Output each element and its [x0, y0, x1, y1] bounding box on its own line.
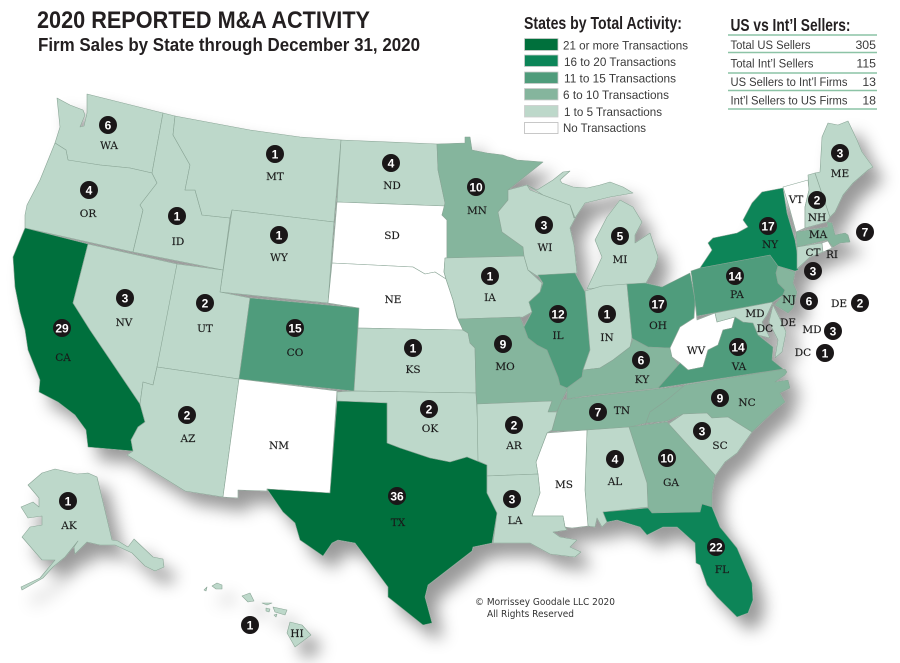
state: UT — [157, 264, 250, 379]
state name labels: IN — [600, 332, 614, 344]
row: total international sellers: 115 — [856, 56, 876, 70]
transaction count badges: 10 — [660, 451, 674, 465]
state name labels: KY — [635, 374, 650, 386]
state name labels: MI — [613, 254, 627, 266]
state name labels: ID — [172, 236, 184, 248]
row: US sellers to international firms: US Sellers to Int’l Firms — [730, 75, 848, 89]
transaction count badges: 7 — [595, 405, 602, 419]
row: total international sellers — [730, 56, 876, 70]
transaction count badges: 5 — [617, 229, 624, 243]
state name labels: MS — [555, 479, 573, 491]
legend: 6 to 10: 6 to 10 Transactions — [563, 88, 669, 102]
state: TX — [267, 401, 497, 625]
state name labels: IL — [552, 330, 564, 342]
transaction count badges: 1 — [247, 618, 254, 632]
state name labels: DC — [795, 347, 811, 359]
state: KS — [354, 328, 476, 393]
legend: none — [524, 121, 646, 135]
title: 2020 REPORTED M&A ACTIVITY — [37, 7, 370, 34]
transaction count badges: 22 — [709, 540, 723, 554]
state: CA — [13, 228, 145, 451]
state: OH — [627, 273, 695, 348]
transaction count badges: 14 — [728, 269, 742, 283]
transaction count badges: 4 — [388, 156, 395, 170]
state: IN — [583, 284, 632, 370]
copyright note: All Rights Reserved — [487, 609, 574, 620]
copyright note: © Morrissey Goodale LLC 2020 — [475, 597, 615, 608]
transaction count badges: 9 — [717, 391, 724, 405]
state: OK — [337, 391, 479, 462]
state name labels: GA — [663, 477, 679, 489]
state name labels: MA — [809, 229, 828, 241]
state: ME — [815, 121, 873, 217]
state name labels: LA — [508, 515, 523, 527]
state: CT — [797, 243, 823, 269]
transaction count badges: 14 — [731, 340, 745, 354]
state name labels: MO — [495, 361, 515, 373]
state: SC — [667, 413, 752, 476]
transaction count badges: 2 — [426, 402, 433, 416]
row: total US sellers: Total US Sellers — [730, 38, 810, 52]
state: GA — [629, 422, 715, 513]
state name labels: NE — [385, 294, 401, 306]
state name labels: VA — [731, 361, 747, 373]
state name labels: AZ — [180, 433, 195, 445]
state: WA — [55, 94, 163, 173]
transaction count badges: 10 — [469, 180, 483, 194]
transaction count badges: 3 — [509, 492, 516, 506]
state name labels: WA — [100, 140, 118, 152]
subtitle: Firm Sales by State through December 31, 2020 — [38, 35, 420, 55]
state name labels: NY — [762, 239, 779, 251]
state: MI upper — [527, 171, 633, 218]
state name labels: MD — [745, 308, 765, 320]
state: AK — [21, 469, 164, 590]
state: PA — [691, 255, 785, 316]
row: total international sellers: Total Int’l Sellers — [730, 56, 814, 70]
transaction count badges: 3 — [830, 324, 837, 338]
transaction count badges: 15 — [288, 321, 302, 335]
transaction count badges: 4 — [86, 183, 93, 197]
transaction count badges: 1 — [410, 341, 417, 355]
state name labels: OK — [422, 423, 438, 435]
state name labels: CT — [805, 247, 821, 259]
transaction count badges: 9 — [500, 337, 507, 351]
transaction count badges: 2 — [511, 418, 518, 432]
transaction count badges: 1 — [822, 346, 829, 360]
transaction count badges: 2 — [814, 193, 821, 207]
transaction count badges: 3 — [541, 218, 548, 232]
map of US states — [13, 94, 873, 647]
state name labels: CA — [55, 352, 71, 364]
state name labels — [55, 140, 849, 640]
state name labels: PA — [730, 289, 744, 301]
state: NH — [805, 173, 830, 228]
state: OR — [25, 143, 157, 252]
state: CO — [239, 298, 359, 391]
transaction count badges: 2 — [202, 296, 209, 310]
table: US vs international sellers — [728, 15, 877, 109]
state: MN — [437, 137, 543, 258]
state name labels: SD — [384, 230, 400, 242]
transaction count badges: 3 — [699, 424, 706, 438]
state name labels: WV — [687, 345, 706, 357]
legend: none: No Transactions — [563, 121, 646, 135]
state: NV — [73, 244, 177, 404]
state: MD — [715, 302, 773, 338]
state name labels: CO — [287, 347, 304, 359]
state: SD — [332, 202, 447, 279]
row: total US sellers — [730, 38, 876, 52]
state: HI — [204, 583, 311, 647]
state: KY — [567, 339, 680, 399]
transaction count badges: 6 — [638, 353, 645, 367]
legend: 11 to 15: 11 to 15 Transactions — [564, 72, 676, 86]
state name labels: DE — [831, 298, 847, 310]
state name labels: WI — [538, 242, 552, 254]
state name labels: NM — [269, 440, 289, 452]
state name labels: NC — [738, 397, 756, 409]
state name labels: DE — [780, 317, 796, 329]
transaction count badges: 2 — [184, 408, 191, 422]
state name labels: HI — [290, 628, 304, 640]
copyright note — [475, 597, 615, 620]
state: DE — [769, 305, 786, 358]
state: LA — [487, 474, 581, 557]
state name labels: MN — [467, 205, 487, 217]
state name labels: RI — [826, 249, 838, 261]
state: NM — [223, 379, 337, 498]
transaction count badges: 17 — [761, 219, 775, 233]
state: MA — [796, 222, 850, 247]
state: VT — [783, 180, 809, 232]
state name labels: NJ — [782, 294, 796, 306]
state: AR — [477, 401, 557, 476]
state: IL — [524, 273, 590, 388]
transaction count badges: 3 — [122, 291, 129, 305]
state name labels: TX — [391, 517, 406, 529]
legend: 16 to 20: 16 to 20 Transactions — [564, 55, 676, 69]
state name labels: AR — [505, 440, 523, 452]
state name labels: DC — [757, 323, 773, 335]
transaction count badges: 4 — [612, 452, 619, 466]
transaction count badges: 2 — [857, 296, 864, 310]
state: ND — [337, 140, 445, 206]
transaction count badges: 1 — [487, 269, 494, 283]
state: NE — [328, 263, 463, 330]
row: international sellers to US firms: Int’l Sellers to US Firms — [730, 94, 848, 108]
transaction count badges: 1 — [272, 147, 279, 161]
transaction count badges: 6 — [105, 118, 112, 132]
state name labels: IA — [484, 292, 496, 304]
transaction count badges — [53, 116, 874, 634]
state: WY — [220, 210, 334, 303]
state: MS — [532, 430, 588, 528]
transaction count badges: 3 — [837, 146, 844, 160]
row: total US sellers: 305 — [855, 38, 876, 52]
transaction count badges: 1 — [276, 228, 283, 242]
legend heading: States by Total Activity: — [524, 13, 682, 33]
state name labels: UT — [197, 323, 213, 335]
state: NJ — [775, 266, 797, 313]
state: AL — [585, 427, 648, 527]
state name labels: OR — [80, 208, 97, 220]
transaction count badges: 1 — [65, 494, 72, 508]
state name labels: NH — [808, 212, 826, 224]
state: TN — [552, 386, 685, 431]
state: WI — [498, 185, 578, 276]
state name labels: ME — [831, 168, 849, 180]
transaction count badges: 3 — [810, 264, 817, 278]
legend: states by total activity — [524, 13, 688, 135]
state: MO — [458, 317, 567, 412]
transaction count badges: 6 — [806, 294, 813, 308]
state: FL — [603, 504, 753, 617]
state: AZ — [127, 367, 239, 497]
row: US sellers to international firms: 13 — [862, 75, 876, 89]
state: WV — [670, 302, 735, 370]
transaction count badges: 29 — [55, 321, 69, 335]
state name labels: WY — [270, 252, 289, 264]
state: MT — [173, 116, 341, 222]
state: MI lower — [587, 200, 658, 289]
transaction count badges: 1 — [604, 307, 611, 321]
state name labels: AL — [607, 476, 622, 488]
state: IA — [444, 256, 542, 319]
legend: 1 to 5 — [524, 105, 662, 119]
state name labels: MD — [802, 324, 822, 336]
state: ID — [133, 113, 230, 270]
transaction count badges: 36 — [390, 489, 404, 503]
transaction count badges: 7 — [862, 225, 869, 239]
state: RI — [822, 241, 832, 252]
transaction count badges: 17 — [651, 297, 665, 311]
transaction count badges: 12 — [551, 307, 565, 321]
state name labels: ND — [383, 180, 401, 192]
state name labels: OH — [649, 320, 667, 332]
row: international sellers to US firms: 18 — [862, 94, 876, 108]
table heading: US vs Int’l Sellers: — [730, 15, 850, 35]
state: NY — [700, 188, 799, 271]
state name labels: NV — [116, 317, 133, 329]
state: VA — [658, 317, 783, 388]
state name labels: SC — [712, 440, 728, 452]
state name labels: VT — [788, 194, 803, 206]
state name labels: MT — [266, 171, 284, 183]
state name labels: AK — [60, 520, 77, 532]
state name labels: FL — [715, 564, 729, 576]
state: NC — [646, 369, 790, 432]
transaction count badges: 1 — [174, 209, 181, 223]
legend: 21 or more: 21 or more Transactions — [563, 38, 688, 52]
legend: 1 to 5: 1 to 5 Transactions — [564, 105, 662, 119]
state name labels: KS — [405, 364, 421, 376]
state name labels: TN — [614, 405, 630, 417]
